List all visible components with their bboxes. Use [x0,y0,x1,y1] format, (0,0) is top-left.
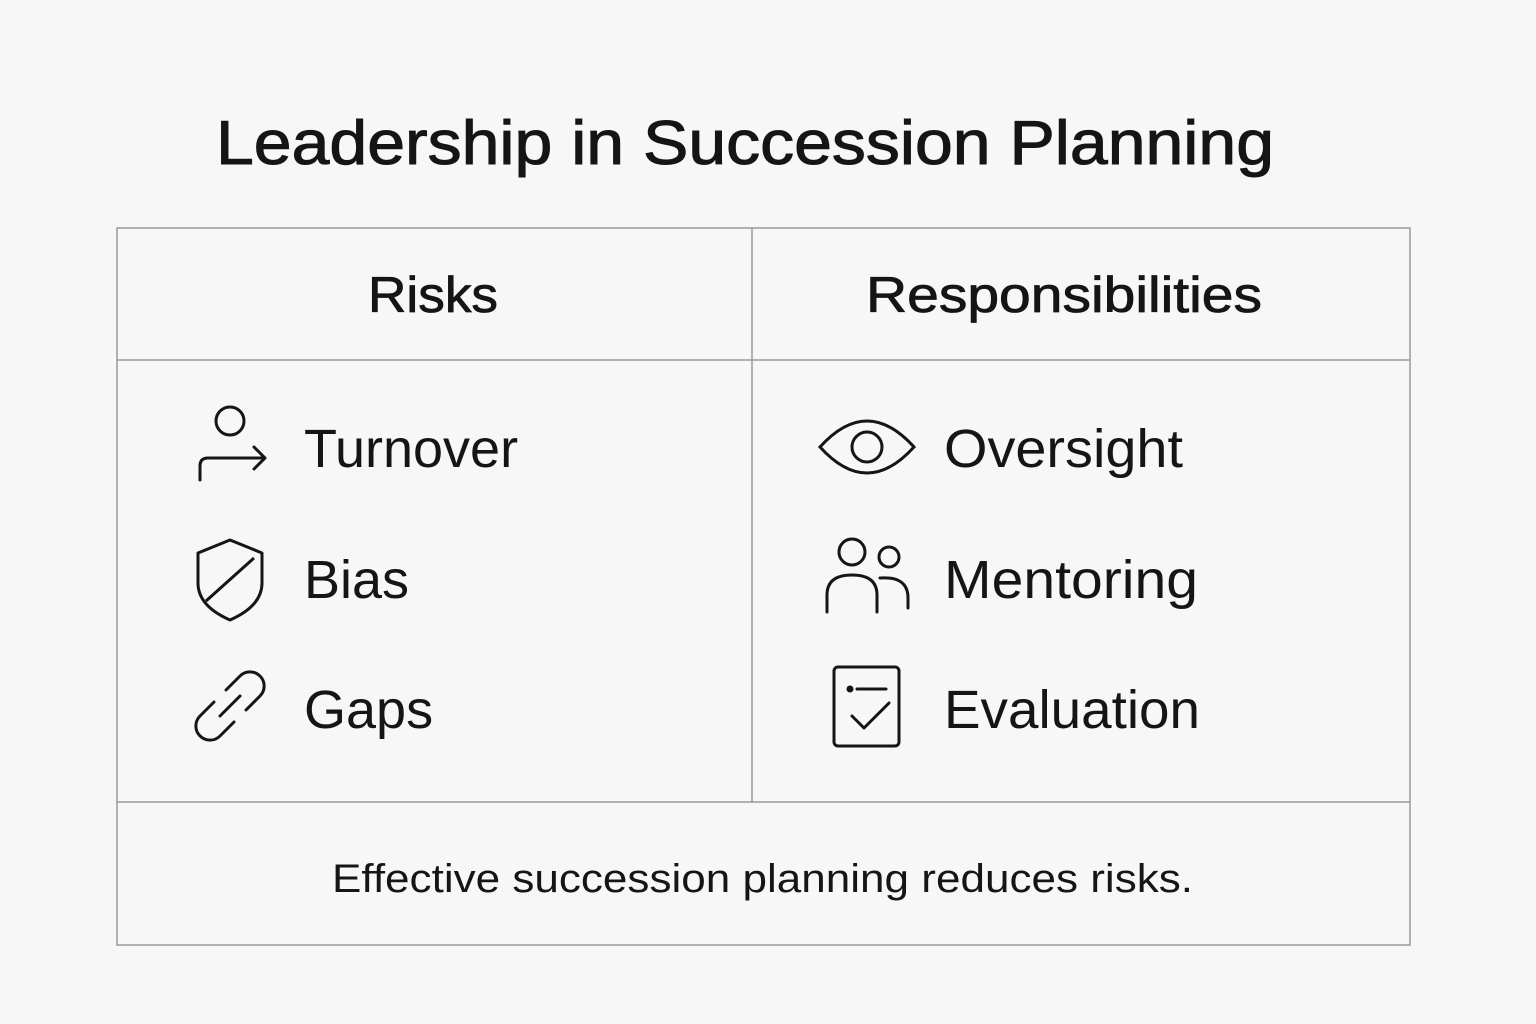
icon: link [196,672,264,740]
resp: evaluation: Evaluation [944,680,1200,740]
risk: bias: Bias [304,550,409,610]
header: risks: Risks [368,267,498,323]
icon: checklist [834,667,899,746]
icon: person arrow [200,407,265,480]
resp: oversight: Oversight [944,419,1183,479]
title: Leadership in Succession Planning [216,109,1274,178]
table [117,228,1410,945]
footer text: Effective succession planning reduces risks. [332,857,1193,901]
resp: mentoring: Mentoring [944,550,1198,610]
icon: people [827,539,908,612]
header: responsibilities: Responsibilities [866,267,1262,323]
risk: gaps: Gaps [304,680,433,740]
risk: turnover: Turnover [304,419,518,479]
icon: shield [198,540,262,620]
icon: eye [820,421,914,473]
